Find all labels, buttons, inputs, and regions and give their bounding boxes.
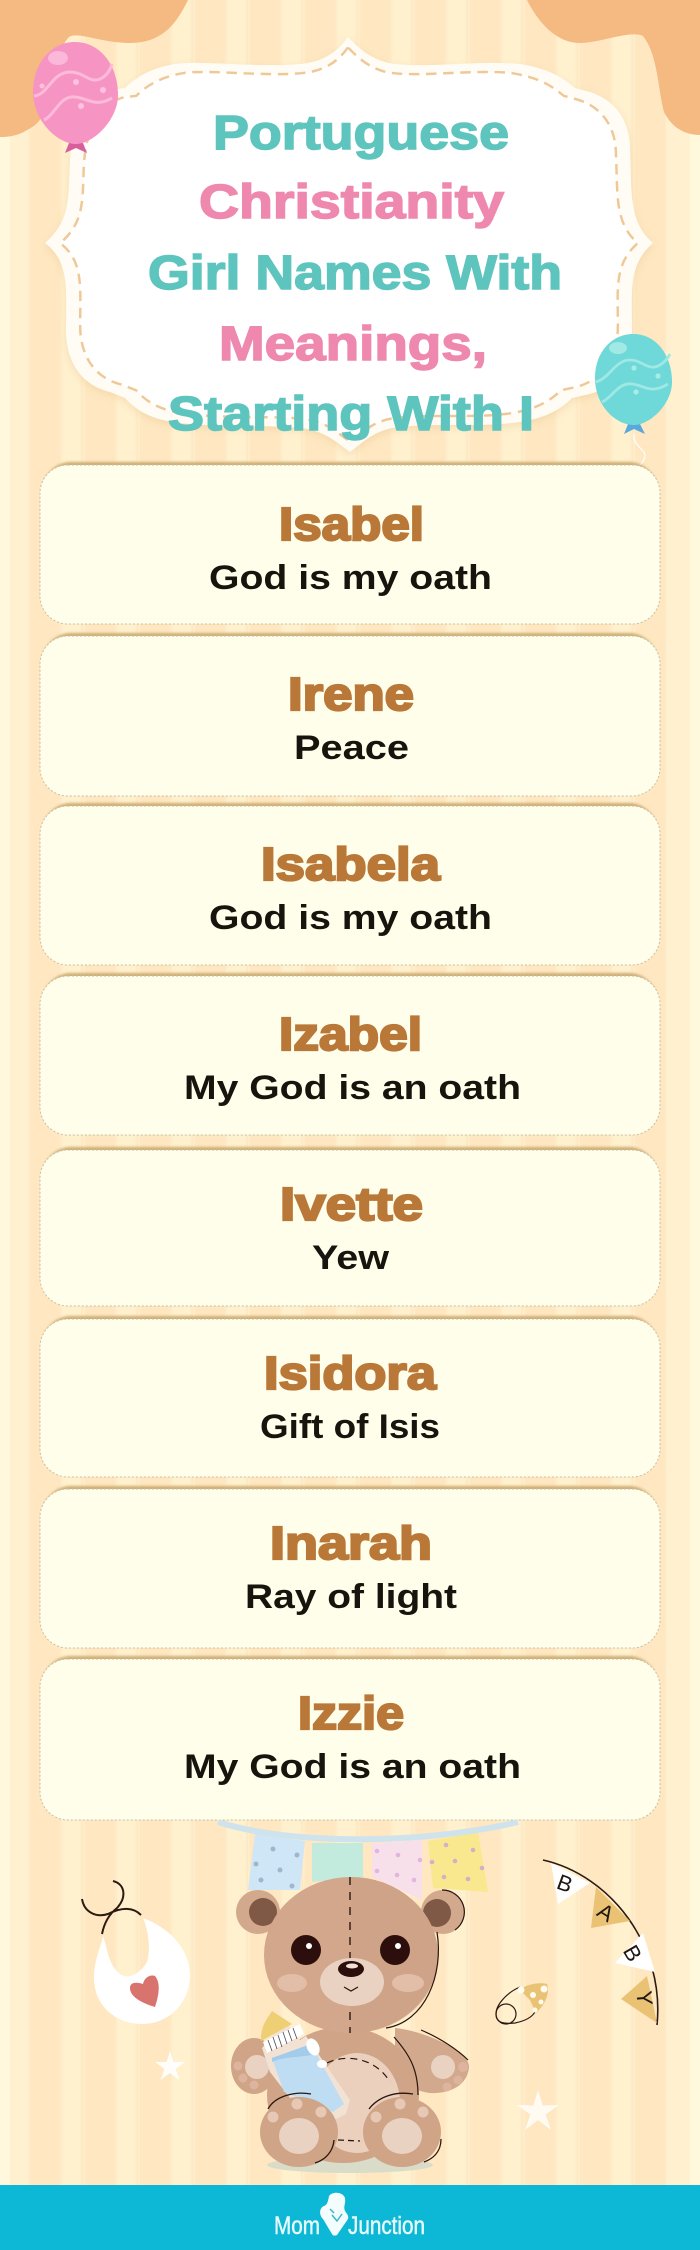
panel: Izzie: Izzie (298, 1687, 404, 1739)
panel: Inarah (40, 1486, 660, 1648)
panel: Ivette (40, 1147, 660, 1306)
title plaque (45, 37, 653, 455)
title heading: Portuguese (213, 107, 509, 160)
title heading: Christianity (199, 176, 504, 229)
icon: baby banner (543, 1860, 658, 2025)
panel: Isabel: God is my oath (209, 559, 492, 597)
footer logo: Junction (348, 2212, 425, 2240)
top right peach drape (527, 0, 700, 135)
panel: Ivette: Yew (312, 1239, 390, 1277)
icon: baby banner: B (554, 1869, 576, 1898)
icon: star left (155, 2051, 185, 2080)
icon: baby bib (82, 1881, 190, 2024)
footer logo: Mom (274, 2212, 320, 2240)
panel: Inarah: Inarah (270, 1517, 432, 1569)
icon: teal balloon (595, 334, 672, 468)
title heading: Starting With I (168, 388, 534, 441)
title heading (148, 107, 562, 441)
footer logo (274, 2193, 425, 2240)
icon: baby banner: B (618, 1941, 647, 1966)
icon: baby banner: A (593, 1898, 619, 1927)
panel: Isabela (40, 803, 660, 965)
panel: Isabel: Isabel (279, 498, 424, 550)
footer bar (0, 2185, 700, 2250)
title heading: Meanings, (219, 318, 487, 371)
panel: Isidora: Gift of Isis (260, 1408, 440, 1446)
panel: Izzie: My God is an oath (184, 1748, 521, 1786)
icon: teddy bear (231, 1877, 469, 2173)
panel: Izzie (40, 1656, 660, 1820)
panel: Ivette: Ivette (280, 1178, 423, 1230)
panel: Irene: Peace (294, 729, 409, 767)
title heading: Girl Names With (148, 247, 562, 300)
panel: Inarah: Ray of light (245, 1578, 457, 1616)
icon: star right (517, 2090, 559, 2130)
icon: baby banner: Y (631, 1990, 658, 2007)
panel: Izabel (40, 973, 660, 1135)
panel: Isabela: Isabela (261, 838, 440, 890)
panel: Izabel: My God is an oath (184, 1069, 521, 1107)
top left peach drape (0, 0, 188, 137)
panel: Irene: Irene (288, 668, 414, 720)
panel: Isabel (40, 462, 660, 624)
panel: Irene (40, 633, 660, 796)
panel: Isidora (40, 1316, 660, 1477)
panel: Izabel: Izabel (279, 1008, 422, 1060)
icon: safety pin (496, 1983, 548, 2024)
icon: pink balloon (33, 42, 118, 153)
panel: Isidora: Isidora (264, 1347, 436, 1399)
panel: Isabela: God is my oath (209, 899, 492, 937)
bunting flags (218, 1822, 518, 1900)
